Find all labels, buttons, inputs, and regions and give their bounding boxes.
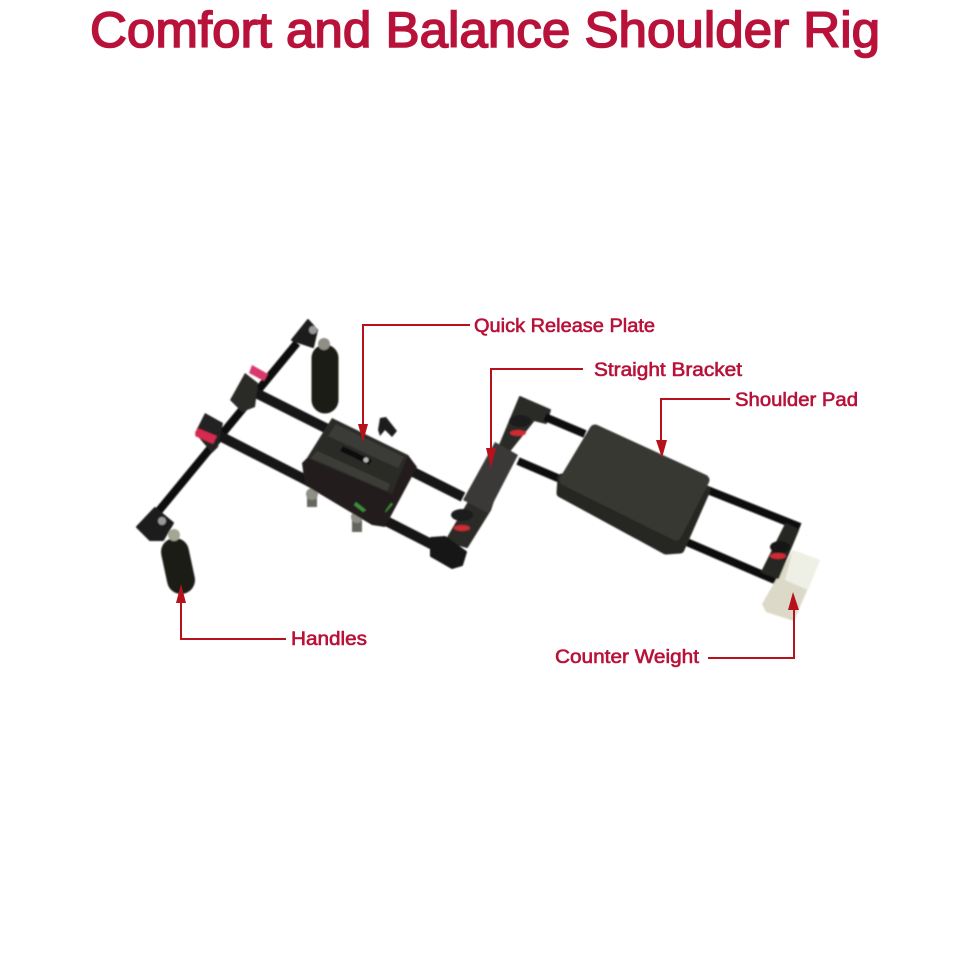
label: quick release plate [358, 316, 655, 442]
quick release plate [302, 417, 417, 532]
straight bracket [431, 397, 550, 568]
label: counter weight [555, 592, 799, 668]
crossbar clamps [195, 365, 268, 453]
label: handles: Handles [291, 629, 367, 650]
right rods [518, 417, 800, 581]
long rods [218, 390, 463, 547]
label: shoulder pad [656, 390, 858, 458]
label: straight bracket: Straight Bracket [594, 360, 743, 381]
photo: shoulder rig [137, 320, 820, 621]
label: quick release plate: Quick Release Plate [474, 316, 655, 337]
label: shoulder pad: Shoulder Pad [735, 390, 858, 411]
rear clamp [762, 524, 798, 578]
label: counter weight: Counter Weight [555, 647, 700, 668]
title: Comfort and Balance Shoulder Rig [90, 2, 880, 58]
label: straight bracket [486, 360, 743, 468]
crossbar with handles [137, 320, 330, 580]
shoulder pad [561, 430, 706, 550]
label: handles [176, 584, 367, 650]
counter weight [762, 550, 820, 621]
